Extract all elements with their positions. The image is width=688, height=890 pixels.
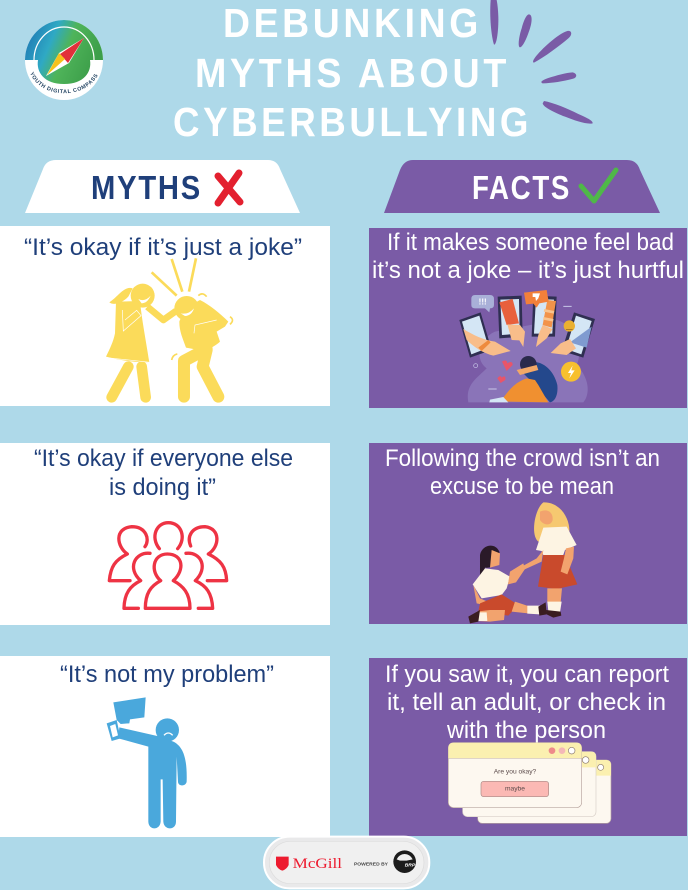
- footer: McGill powered by BRP badge: [264, 837, 429, 888]
- text: myth 2: is doing it”: [109, 474, 216, 501]
- logo: Youth Digital Compass: YOUTH DIGITAL COMPASS: [30, 72, 98, 94]
- illustration: phones pointing at sad person: !!!: [479, 297, 487, 306]
- text: myth 3: “It’s not my problem”: [60, 661, 274, 688]
- text: myth 2: “It’s okay if everyone else: [34, 445, 293, 472]
- illustration: are you okay pop-up windows: maybe: [505, 785, 525, 792]
- text: fact 3: with the person: [446, 717, 606, 744]
- title: MYTHS ABOUT: [195, 50, 510, 96]
- icon: green check: [581, 170, 616, 201]
- illustration: are you okay pop-up windows: Are you okay?: [494, 768, 537, 775]
- panel: facts tab: FACTS: [472, 169, 571, 206]
- panel: fact 1: [369, 228, 687, 408]
- title: CYBERBULLYING: [173, 99, 532, 145]
- title: [173, 0, 532, 145]
- text: fact 1: If it makes someone feel bad: [387, 229, 674, 256]
- text: myth 1: “It’s okay if it’s just a joke”: [24, 234, 302, 261]
- text: fact 2: [385, 445, 660, 500]
- illustration: girl helping another girl up: [468, 502, 577, 623]
- footer: McGill powered by BRP badge: BRP: [405, 863, 416, 869]
- icon: red group of people: [109, 523, 227, 608]
- text: fact 2: Following the crowd isn’t an: [385, 445, 660, 472]
- text: fact 3: [385, 661, 669, 744]
- panel: fact 2: [369, 443, 687, 624]
- panel: myths tab: MYTHS: [91, 169, 202, 206]
- text: fact 2: excuse to be mean: [430, 473, 614, 500]
- title: DEBUNKING: [223, 0, 482, 46]
- panel: fact 3: [369, 658, 687, 836]
- text: fact 1: it’s not a joke – it’s just hurtful: [372, 257, 684, 284]
- text: fact 3: If you saw it, you can report: [385, 661, 669, 688]
- icon: purple burst rays: [490, 0, 593, 124]
- footer: McGill powered by BRP badge: McGill: [293, 856, 342, 872]
- footer: McGill powered by BRP badge: POWERED BY: [354, 861, 389, 866]
- logo: Youth Digital Compass: [25, 20, 103, 100]
- panel: myth 1: [0, 226, 330, 406]
- icon: red cross: [218, 173, 240, 203]
- panel: myth 2: [0, 443, 330, 625]
- text: myth 2: [34, 445, 293, 501]
- illustration: phones pointing at sad person: [459, 290, 595, 402]
- icon: yellow figures laughing: [106, 258, 232, 397]
- icon: sad person with phone: [107, 697, 187, 828]
- illustration: are you okay pop-up windows: [448, 743, 611, 823]
- panel: facts tab: [384, 160, 660, 213]
- panel: myths tab: [25, 160, 300, 213]
- text: fact 3: it, tell an adult, or check in: [387, 689, 666, 716]
- text: fact 1: [372, 229, 684, 284]
- panel: myth 3: [0, 656, 330, 837]
